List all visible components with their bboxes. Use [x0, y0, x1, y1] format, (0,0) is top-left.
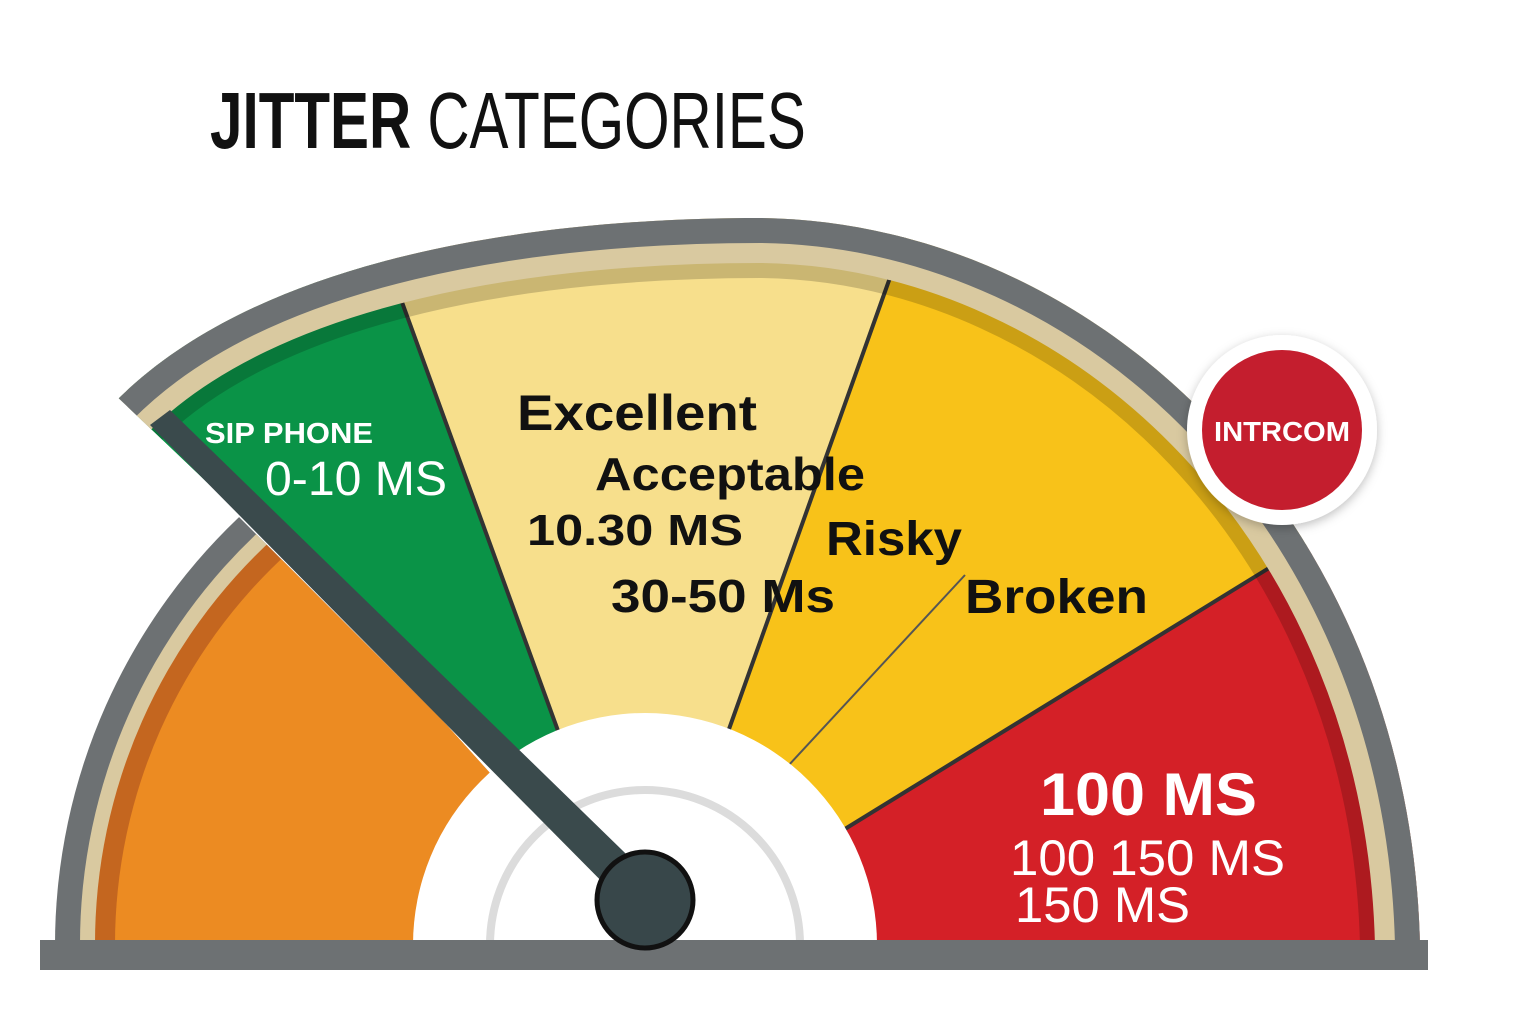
badge: intrcom [1187, 335, 1377, 525]
colored sectors with rim [118, 218, 1420, 940]
baseline [40, 940, 1428, 970]
label: excellent: Excellent [517, 385, 757, 441]
label: sip phone: SIP PHONE [205, 418, 373, 450]
label: risky: Risky [826, 513, 962, 566]
gauge [40, 218, 1428, 970]
labels [205, 385, 1285, 933]
title: JITTER CATEGORIES [210, 76, 806, 165]
label: 10.30 ms: 10.30 MS [527, 506, 743, 555]
label: 0-10 ms: 0-10 MS [265, 453, 447, 506]
label: 30-50 ms: 30-50 Ms [611, 570, 835, 622]
label: acceptable: Acceptable [595, 448, 865, 500]
badge: intrcom: INTRCOM [1214, 416, 1350, 447]
orange sector [55, 517, 490, 940]
label: 150 ms: 150 MS [1015, 877, 1190, 933]
needle [150, 410, 693, 948]
white center [413, 713, 877, 945]
label: 100 ms: 100 MS [1040, 761, 1257, 828]
label: broken: Broken [965, 571, 1148, 624]
label: 100 150 ms: 100 150 MS [1010, 830, 1285, 886]
